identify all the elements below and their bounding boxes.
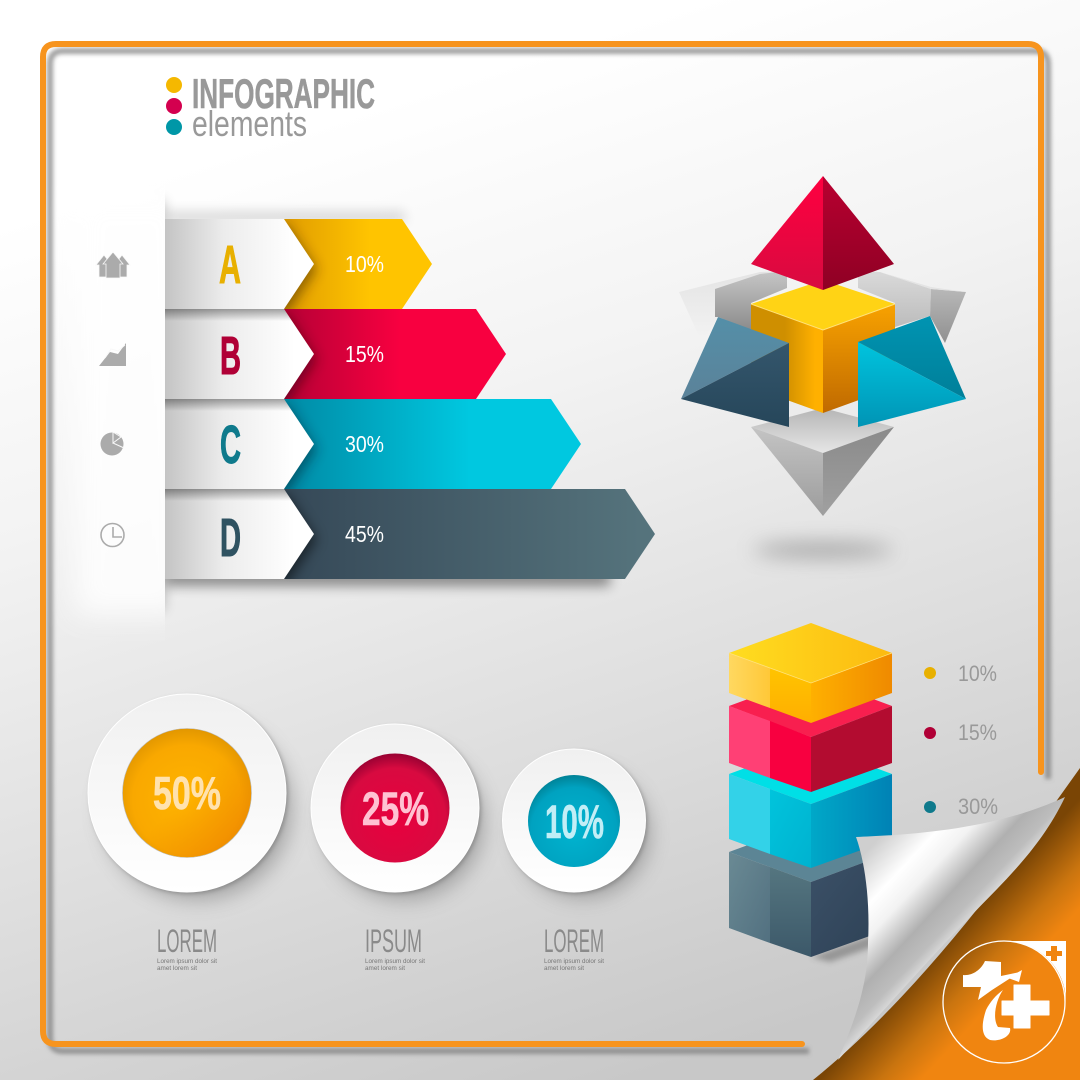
heading: INFOGRAPHIC: INFOGRAPHIC: [192, 70, 375, 117]
row D: 45%: [345, 521, 384, 547]
icon: area chart: [99, 343, 126, 366]
donut: 10%: 10%: [545, 795, 604, 848]
teal right wedge: [858, 316, 966, 427]
icon: clock: [101, 524, 124, 546]
caption: LOREM right: [544, 923, 604, 972]
logo badge: [943, 941, 1066, 1063]
legend 15%: [924, 720, 997, 745]
donut: 25%: [311, 724, 484, 900]
row C: 30%: [345, 431, 384, 457]
donut: 50%: 50%: [153, 767, 221, 819]
small plus: [1046, 946, 1062, 961]
legend 30%: 30%: [958, 794, 998, 819]
row C: C: [220, 415, 241, 475]
grey back right wing: [858, 271, 966, 343]
row A: [165, 219, 432, 314]
caption: IPSUM: IPSUM: [365, 923, 422, 959]
page curl: [838, 797, 1065, 1060]
slate block: [729, 822, 892, 957]
row B: B: [220, 326, 241, 386]
caption: IPSUM: Lorem ipsum dolor sit: [365, 959, 425, 965]
caption: IPSUM: amet lorem sit: [365, 966, 405, 972]
3D star figure: [679, 176, 966, 557]
red block: [729, 676, 892, 792]
grey back left wing: [679, 271, 787, 343]
caption: LOREM right: LOREM: [544, 923, 604, 959]
title bullet dots: [166, 77, 182, 135]
caption: LOREM right: amet lorem sit: [544, 966, 584, 972]
legend 30%: [924, 794, 998, 819]
yellow cube: [751, 280, 895, 413]
row A: A: [219, 235, 241, 295]
title block: [166, 70, 375, 144]
caption: LOREM left: Lorem ipsum dolor sit: [157, 959, 217, 965]
donut: 10%: [502, 749, 650, 898]
donut: 25%: 25%: [362, 782, 429, 835]
logo mark: [963, 961, 1049, 1040]
caption: LOREM left: amet lorem sit: [157, 966, 197, 972]
icon: three arrows: [96, 252, 130, 278]
row B: 15%: [345, 341, 384, 367]
caption: LOREM left: [157, 923, 217, 972]
percentage arrow bar chart: [75, 195, 655, 615]
row D: D: [220, 508, 241, 568]
stack legend: [924, 661, 998, 819]
caption: IPSUM: [365, 923, 425, 972]
row A: 10%: [345, 251, 384, 277]
donut: 50%: [88, 694, 292, 900]
legend 10%: 10%: [958, 661, 997, 686]
stacked isometric blocks: [729, 623, 892, 962]
orange turned corner: [813, 768, 1080, 1080]
grey lower pyramid: [751, 408, 894, 516]
cyan block: [729, 744, 892, 868]
floor shadow: [753, 543, 893, 557]
blue left wedge: [681, 317, 789, 427]
red pyramid: [751, 176, 894, 290]
caption: LOREM left: LOREM: [157, 923, 217, 959]
icon: pie chart: [100, 432, 124, 456]
row C: [165, 399, 581, 494]
legend 15%: 15%: [958, 720, 997, 745]
caption: LOREM right: Lorem ipsum dolor sit: [544, 959, 604, 965]
legend 10%: [924, 661, 997, 686]
row B: [165, 309, 506, 404]
row D: [165, 489, 655, 584]
subheading: elements: elements: [192, 103, 307, 144]
yellow block: [729, 623, 892, 723]
